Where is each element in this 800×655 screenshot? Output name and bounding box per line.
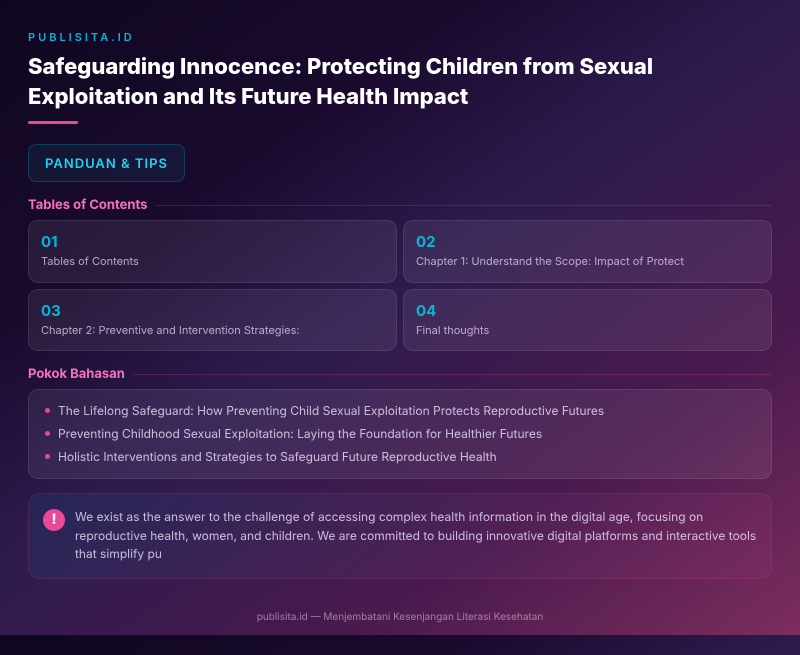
topics panel (28, 389, 772, 479)
card 01 (28, 220, 397, 283)
card 04: Final thoughts (416, 323, 489, 337)
category badge (28, 144, 185, 182)
card 01: Tables of Contents (41, 254, 139, 268)
icon: exclamation: ! (51, 511, 57, 528)
callout text: that simplify pu (75, 546, 162, 561)
topic 3: Holistic Interventions and Strategies to Safeguard Future Reproductive Health (58, 449, 497, 464)
title accent bar (28, 121, 78, 124)
card 04 (403, 289, 772, 351)
category badge: PANDUAN & TIPS (45, 156, 168, 172)
card 02 (403, 220, 772, 283)
heading: pokok bahasan: Pokok Bahasan (28, 366, 125, 382)
callout (28, 493, 772, 579)
brand label: PUBLISITA.ID (28, 30, 135, 44)
card 03 (28, 289, 397, 351)
topic 2: Preventing Childhood Sexual Exploitation: Laying the Foundation for Healthier Futures (58, 426, 542, 441)
card 01: 01 (41, 232, 58, 251)
callout text: reproductive health, women, and children. We are committed to building innovative digital platforms and interactive tools (75, 528, 756, 543)
heading: tables of contents: Tables of Contents (28, 197, 147, 213)
title (28, 54, 653, 110)
footer: publisita.id — Menjembatani Kesenjangan Literasi Kesehatan (257, 611, 543, 623)
title: Safeguarding Innocence: Protecting Children from Sexual (28, 54, 653, 80)
card 02: 02 (416, 232, 436, 251)
title: Exploitation and Its Future Health Impact (28, 84, 468, 110)
card 03: Chapter 2: Preventive and Intervention Strategies: (41, 323, 300, 337)
topic 1: The Lifelong Safeguard: How Preventing Child Sexual Exploitation Protects Reproductive Futures (58, 403, 604, 418)
card 03: 03 (41, 301, 61, 320)
icon: exclamation (43, 509, 65, 531)
card 02: Chapter 1: Understand the Scope: Impact of Protect (416, 254, 684, 268)
callout text (75, 509, 756, 561)
callout text: We exist as the answer to the challenge of accessing complex health information in the digital age, focusing on (75, 509, 703, 524)
card 04: 04 (416, 301, 436, 320)
